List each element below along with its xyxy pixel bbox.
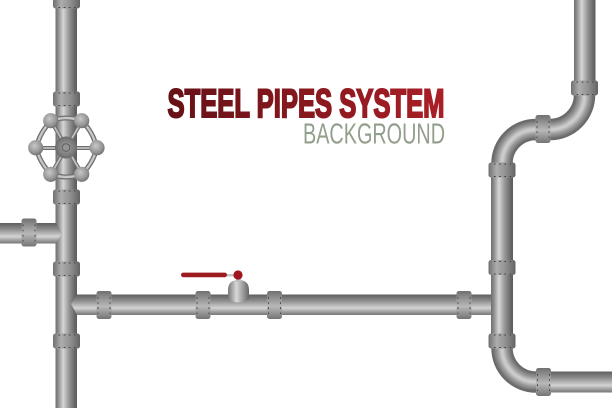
wheel hub (55, 136, 77, 158)
subtitle: background: BACKGROUND (303, 118, 445, 150)
left vertical pipe (53, 0, 80, 408)
lower right elbow pipe (488, 334, 612, 396)
wheel spokes (36, 121, 97, 174)
right vertical pipe with S-bend (488, 0, 598, 343)
title: steel pipes system: STEEL PIPES SYSTEM (168, 82, 444, 126)
valve wheel (28, 113, 105, 182)
ball valve with red lever (181, 270, 249, 302)
left side branch pipe (0, 218, 62, 246)
main horizontal pipe (71, 291, 498, 319)
wheel knobs (28, 113, 105, 182)
wheel rim (36, 118, 97, 177)
